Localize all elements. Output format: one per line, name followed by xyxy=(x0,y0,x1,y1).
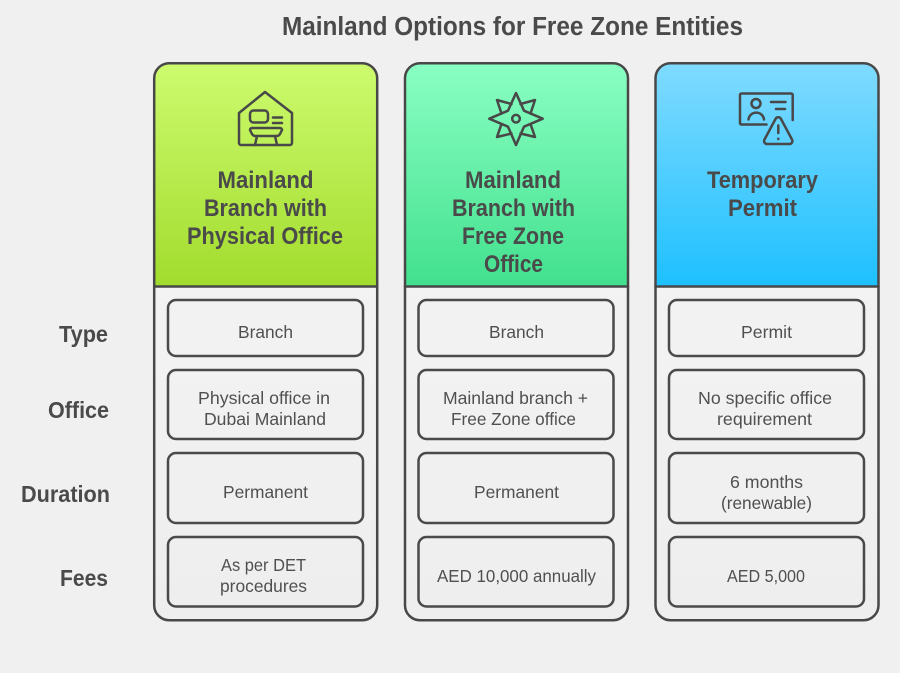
cell: No specific office requirement: No specific office xyxy=(698,388,832,408)
cell: Permanent: Permanent xyxy=(474,482,559,502)
cell: Branch: Branch xyxy=(489,322,544,342)
panel body xyxy=(154,63,377,620)
cell: Permit: Permit xyxy=(741,322,792,342)
icon: house with desk xyxy=(239,92,292,145)
panel heading: Branch with xyxy=(204,195,327,222)
panel: Mainland Branch with Free Zone Office xyxy=(405,63,628,620)
cell: Permanent xyxy=(168,453,363,523)
panel outline xyxy=(656,63,878,620)
cell: Permanent xyxy=(418,453,614,523)
cell: Branch xyxy=(168,300,363,356)
panel body xyxy=(656,63,878,620)
row label: Office: Office xyxy=(48,397,109,423)
panel header xyxy=(656,63,878,286)
panel heading: Physical Office xyxy=(187,223,343,250)
cell: Physical office xyxy=(168,370,363,439)
panel heading xyxy=(452,167,575,278)
row label: Fees: Fees xyxy=(60,565,108,591)
cell: 6 months (renewable) xyxy=(669,453,864,523)
row label: Type: Type xyxy=(59,321,108,347)
cell: Physical office: Dubai Mainland xyxy=(204,409,326,429)
title: Mainland Options for Free Zone Entities xyxy=(282,13,743,41)
cell: Mainland branch + Free Zone office: Free Zone office xyxy=(451,409,576,429)
panel body xyxy=(405,63,628,620)
panel heading: Mainland xyxy=(465,167,561,194)
cell: AED 5,000 xyxy=(669,537,864,606)
cell: As per DET procedures: As per DET xyxy=(221,555,306,575)
row labels xyxy=(21,321,110,591)
cell: No specific office requirement: requirement xyxy=(717,409,812,429)
panel header xyxy=(405,63,628,286)
cell: Mainland branch + Free Zone office xyxy=(418,370,614,439)
panel heading: Temporary xyxy=(707,167,819,194)
cell: Permit xyxy=(669,300,864,356)
panel heading: Free Zone xyxy=(462,223,564,250)
panel: Temporary Permit xyxy=(656,63,878,620)
cell: AED 10,000 annually: AED 10,000 annually xyxy=(437,566,596,586)
cell: Branch xyxy=(418,300,614,356)
cell: Physical office: Physical office in xyxy=(198,388,330,408)
cell: 6 months (renewable): (renewable) xyxy=(721,493,812,513)
panel heading: Mainland xyxy=(218,167,314,194)
cell: 6 months (renewable): 6 months xyxy=(730,472,803,492)
panel heading: Office xyxy=(484,251,543,278)
cell: As per DET procedures xyxy=(168,537,363,606)
cell: Mainland branch + Free Zone office: Mainland branch + xyxy=(443,388,588,408)
cell: AED 10,000 annually xyxy=(418,537,614,606)
panel header xyxy=(154,63,377,286)
cell: Branch: Branch xyxy=(238,322,293,342)
row label: Duration: Duration xyxy=(21,481,110,507)
panel heading xyxy=(707,167,819,222)
panel heading: Permit xyxy=(728,195,797,222)
cell: AED 5,000: AED 5,000 xyxy=(727,566,805,586)
panel outline xyxy=(154,63,377,620)
icon: ID card with warning triangle xyxy=(740,94,793,144)
panel outline xyxy=(405,63,628,620)
icon: eight-point star xyxy=(489,93,543,145)
cell: As per DET procedures: procedures xyxy=(220,576,307,596)
cell: No specific office requirement xyxy=(669,370,864,439)
panel: Mainland Branch with Physical Office xyxy=(154,63,377,620)
cell: Permanent: Permanent xyxy=(223,482,308,502)
panel heading: Branch with xyxy=(452,195,575,222)
panel heading xyxy=(187,167,343,250)
